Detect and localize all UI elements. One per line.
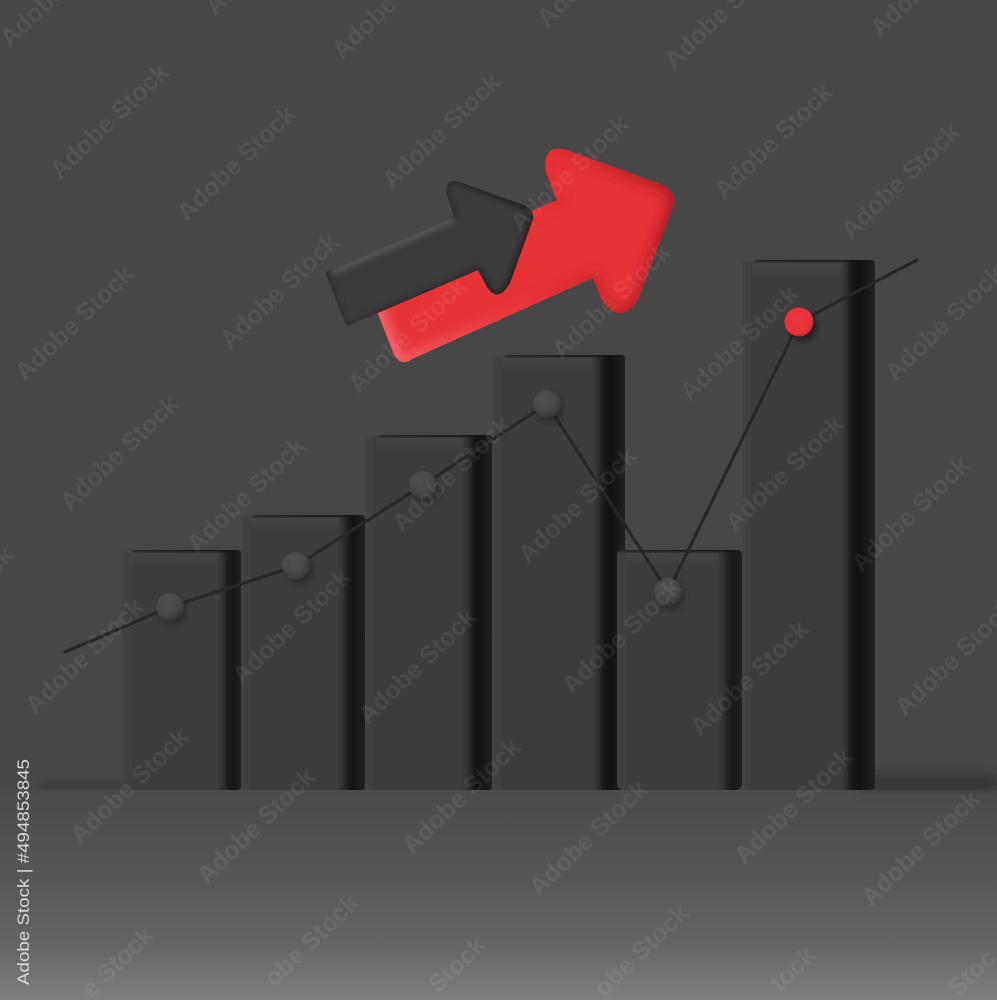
watermarks: tock: [765, 941, 821, 997]
point 1: [156, 593, 187, 625]
watermarks: Adobe Stock: [547, 238, 676, 364]
bar 3: [374, 435, 492, 790]
watermarks: Adobe Stock: [513, 442, 642, 568]
watermarks: Adobe Stock: [377, 68, 506, 194]
watermarks: Adobe Stock: [729, 743, 858, 869]
watermarks: Adobe Stock: [20, 593, 149, 719]
point 5: [654, 578, 685, 610]
watermarks: Adobe Stock: [192, 763, 321, 889]
watermarks: obe Stock: [589, 899, 694, 1000]
watermarks: Adobe Stock: [856, 785, 985, 911]
watermarks: Adobe Stock: [397, 733, 526, 859]
watermarks: Adobe Stock: [227, 563, 356, 689]
watermarks: Adobe Stock: [353, 603, 482, 729]
watermarks: obe Stock: [259, 889, 364, 992]
data points: [156, 308, 817, 625]
watermarks: Adobe Stock: [685, 615, 814, 741]
point 3: [409, 471, 440, 503]
icon: dark arrow: [326, 181, 533, 325]
watermarks: Adobe Stock: [524, 775, 653, 901]
point 2: [282, 552, 313, 584]
watermarks: Adobe Stock: [387, 411, 516, 537]
watermarks: Adobe Stock: [846, 451, 975, 577]
bar 2: [250, 515, 365, 790]
icon: red arrow: [366, 149, 674, 362]
watermarks: Adobe Stock: [343, 272, 472, 398]
bar 5: [612, 550, 742, 802]
trend line: [65, 260, 917, 652]
watermarks: Adobe Stock: [172, 100, 301, 226]
watermarks: Adobe Stock: [836, 118, 965, 244]
watermarks: Adobe Stock: [10, 260, 139, 386]
background wall: [0, 0, 997, 790]
bar chart: [118, 260, 875, 802]
point 4: [533, 390, 564, 422]
floor: [0, 790, 997, 1000]
watermarks: Adobe Stock: [55, 390, 184, 516]
stock id caption: Adobe Stock | #494853845: [14, 759, 33, 985]
watermarks: Adobe Stock: [215, 228, 344, 354]
watermarks: Adobe Stock: [45, 58, 174, 184]
watermarks: Adobe Stock: [65, 723, 194, 849]
bar 6: [751, 260, 875, 790]
watermarks: Adobe Stock: [557, 573, 686, 699]
floor shadow left: [40, 781, 130, 790]
bar 4: [502, 355, 625, 790]
watermarks: Adobe Stock: [720, 410, 849, 536]
watermarks: Adobe Stock: [182, 432, 311, 558]
bar 1: [132, 550, 241, 790]
watermarks: Stock: [423, 931, 491, 999]
point 6 red: [784, 308, 817, 341]
watermarks: Adobe Stock: [505, 110, 634, 236]
floor shadow right: [860, 776, 997, 790]
watermarks: Adobe Stock: [675, 280, 804, 406]
watermarks: Adobe Stock: [709, 78, 838, 204]
